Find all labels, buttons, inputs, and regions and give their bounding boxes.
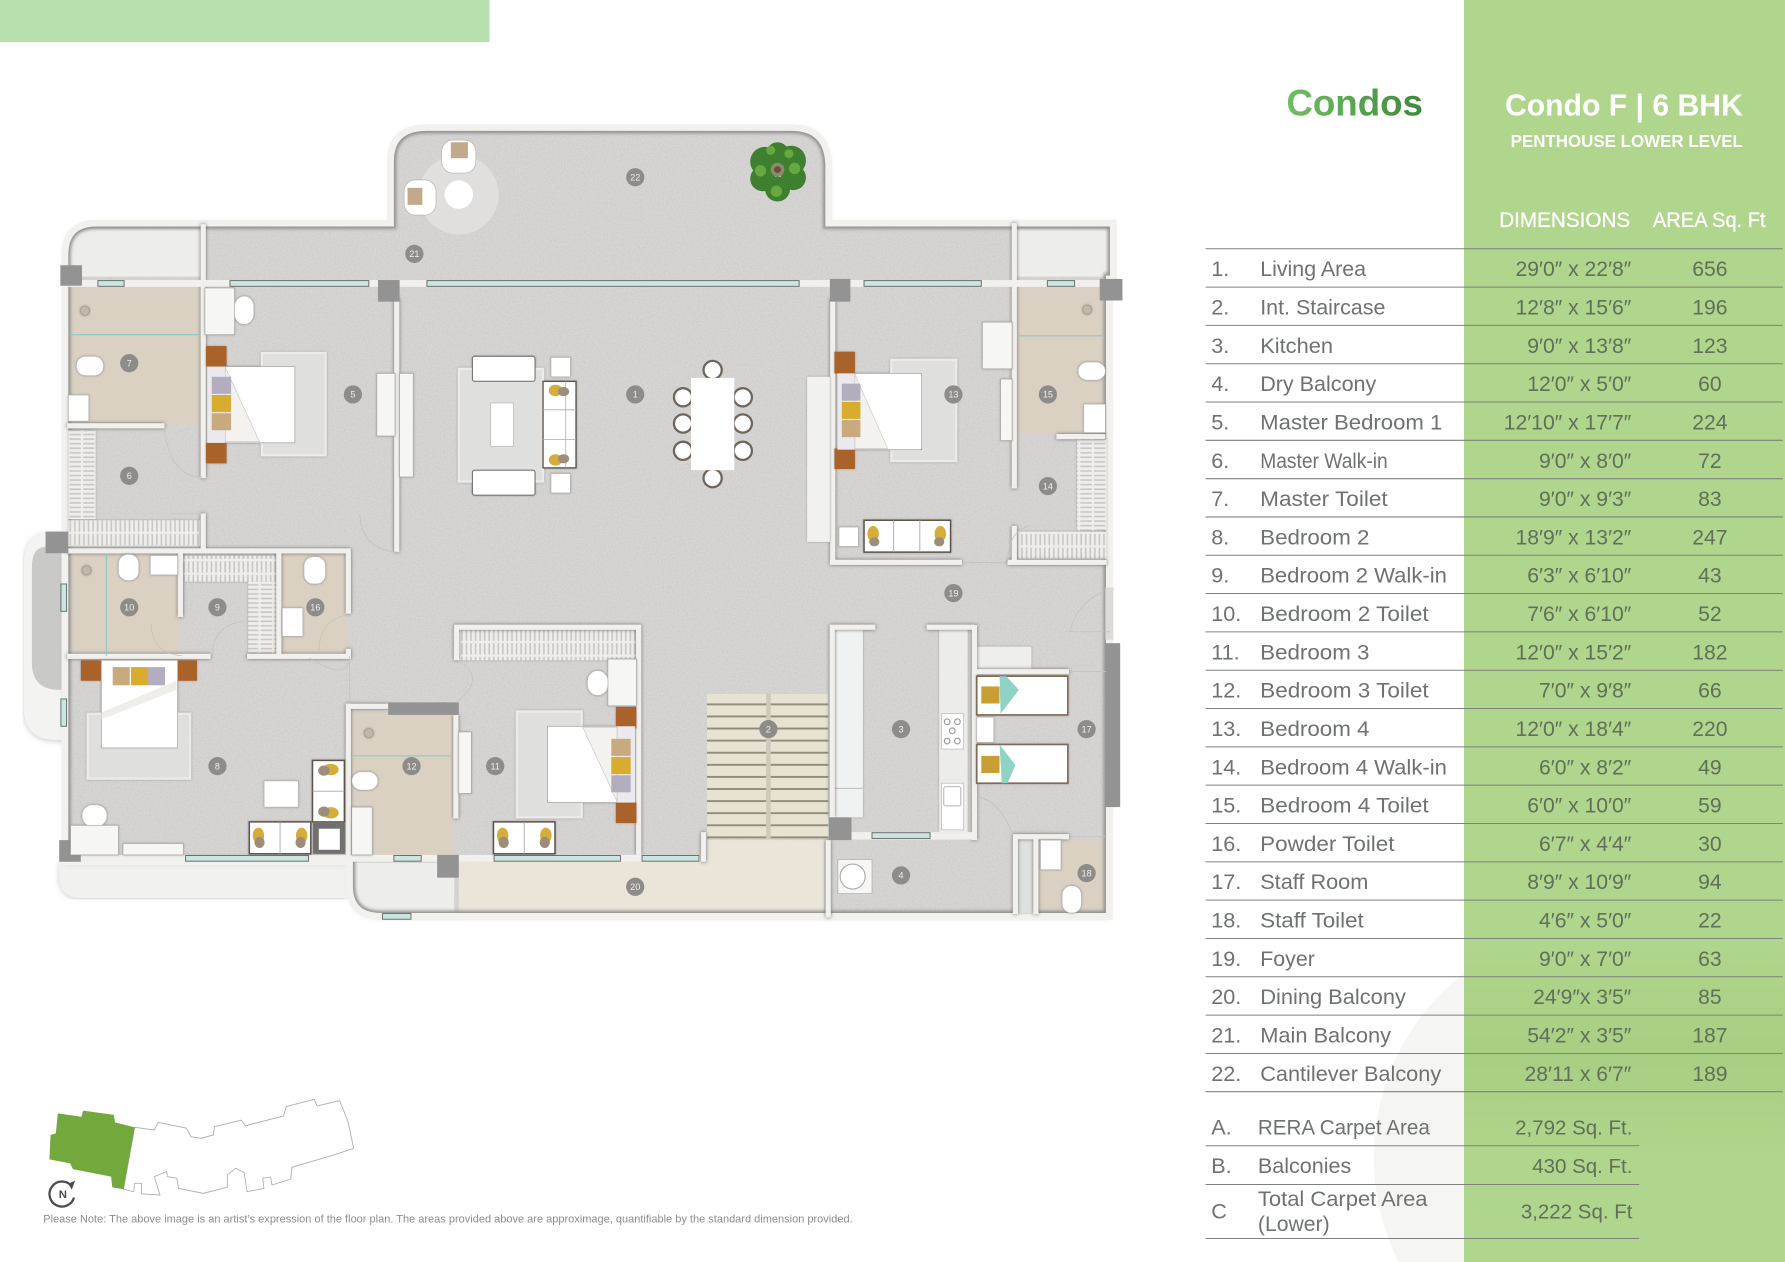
row 17: Staff Room	[1260, 869, 1368, 894]
key plan	[49, 1099, 354, 1195]
marker 11: 11	[490, 761, 500, 771]
row 16: Powder Toilet	[1260, 831, 1395, 856]
marker 13	[944, 385, 963, 404]
marker 10	[120, 598, 138, 616]
marker 19: 19	[948, 588, 958, 598]
summary A: A.	[1211, 1114, 1232, 1139]
summary C: (Lower)	[1258, 1211, 1330, 1236]
marker 1: 1	[633, 390, 638, 400]
bathroom fixtures	[68, 305, 1105, 913]
row 17: 17.	[1211, 869, 1241, 894]
marker 18: 18	[1082, 868, 1092, 878]
row 20: Dining Balcony	[1260, 984, 1406, 1009]
column header: area: AREA Sq. Ft	[1653, 209, 1766, 232]
row 7: Master Toilet	[1260, 486, 1388, 511]
row 7: 83	[1698, 488, 1722, 511]
row 19	[1211, 946, 1722, 971]
bedroom 2 furniture	[71, 660, 345, 855]
balcony voids	[68, 229, 1110, 913]
row 1: Living Area	[1260, 256, 1367, 281]
row 18	[1211, 908, 1722, 933]
marker 8	[208, 757, 227, 775]
row 7	[1211, 486, 1722, 511]
row 4: 12′0″ x 5′0″	[1527, 373, 1632, 396]
row 13: 220	[1692, 718, 1728, 741]
marker 6: 6	[127, 471, 132, 481]
master bedroom 1 furniture	[205, 288, 413, 477]
marker 3	[892, 720, 910, 738]
row 16: 16.	[1211, 831, 1241, 856]
outer wall	[65, 127, 1113, 916]
row 5: 224	[1692, 411, 1728, 434]
marker 16: 16	[310, 603, 320, 613]
marker 22	[626, 168, 644, 186]
teal shower lines	[69, 335, 1104, 756]
area summary table	[1206, 1114, 1639, 1239]
marker 21	[405, 245, 423, 263]
marker 5: 5	[350, 390, 355, 400]
marker 14	[1039, 477, 1057, 495]
disclaimer note: Please Note: The above image is an artist’s expression of the floor plan. The areas provided above are approximage, quantifiable by the standard dimension provided.	[43, 1214, 853, 1226]
interior walls	[67, 223, 1107, 918]
row 12: Bedroom 3 Toilet	[1260, 678, 1429, 703]
row 6: 6.	[1211, 448, 1229, 473]
foyer door opening	[1105, 587, 1113, 640]
row 9: 9.	[1211, 563, 1229, 588]
door swings	[151, 428, 1110, 837]
row 1: 656	[1692, 258, 1728, 281]
row 8: Bedroom 2	[1260, 524, 1369, 549]
marker 14: 14	[1043, 481, 1053, 491]
summary B	[1211, 1153, 1632, 1178]
row 11	[1211, 639, 1728, 664]
heading: Condos: Condos	[1286, 83, 1423, 124]
row 19: Foyer	[1260, 946, 1315, 971]
row 12: 12.	[1211, 678, 1241, 703]
row 18: Staff Toilet	[1260, 908, 1364, 933]
north compass	[49, 1180, 75, 1207]
row 7: 9′0″ x 9′3″	[1539, 488, 1632, 511]
row 22: 189	[1692, 1063, 1728, 1086]
row 13: Bedroom 4	[1260, 716, 1369, 741]
row 14: 14.	[1211, 754, 1241, 779]
summary A: RERA Carpet Area	[1258, 1114, 1431, 1139]
row 9: Bedroom 2 Walk-in	[1260, 563, 1447, 588]
living room rug and furniture	[459, 356, 576, 495]
row 12	[1211, 678, 1722, 703]
marker 15: 15	[1043, 390, 1053, 400]
marker 7: 7	[127, 358, 132, 368]
bedroom 3 furniture	[459, 659, 636, 854]
marker 12	[402, 757, 421, 775]
marker 6	[120, 467, 138, 485]
row 13: 13.	[1211, 716, 1241, 741]
row 11: 11.	[1211, 639, 1240, 664]
row 8: 18′9″ x 13′2″	[1515, 526, 1632, 549]
row 20	[1211, 984, 1722, 1009]
row 12: 66	[1698, 680, 1722, 703]
right green panel	[1374, 0, 1785, 1262]
row 16: 6′7″ x 4′4″	[1539, 833, 1632, 856]
row 9	[1211, 563, 1722, 588]
marker 22: 22	[630, 173, 640, 183]
subheading: penthouse lower level: PENTHOUSE LOWER LEVEL	[1511, 131, 1743, 151]
row 19: 9′0″ x 7′0″	[1539, 948, 1632, 971]
floor speckle texture	[57, 120, 1121, 922]
row 13: 12′0″ x 18′4″	[1515, 718, 1632, 741]
row 21: Main Balcony	[1260, 1023, 1391, 1048]
marker 8: 8	[215, 761, 220, 771]
marker 2	[759, 720, 778, 738]
column header: dimensions: DIMENSIONS	[1499, 209, 1630, 232]
marker 11	[486, 757, 504, 775]
marker 9	[208, 598, 227, 616]
dining balcony floor	[459, 840, 824, 913]
row 5	[1211, 409, 1728, 434]
staff room beds	[977, 676, 1068, 783]
row 13	[1211, 716, 1728, 741]
row 14	[1211, 754, 1722, 779]
row 9: 6′3″ x 6′10″	[1527, 565, 1632, 588]
row 6: 9′0″ x 8′0″	[1539, 450, 1632, 473]
floor plan	[24, 120, 1122, 922]
row 10	[1211, 601, 1722, 626]
row 5: 12′10″ x 17′7″	[1504, 411, 1632, 434]
marker 2: 2	[766, 724, 771, 734]
row 11: 182	[1692, 641, 1728, 664]
marker 17: 17	[1082, 724, 1092, 734]
bottom ledge	[59, 862, 347, 898]
marker 12: 12	[406, 761, 417, 771]
row 8: 247	[1692, 526, 1728, 549]
key plan highlighted unit	[49, 1111, 135, 1189]
row 21: 21.	[1211, 1023, 1241, 1048]
closets	[68, 430, 1107, 913]
row 5: 5.	[1211, 409, 1229, 434]
row 12: 7′0″ x 9′8″	[1539, 680, 1632, 703]
row 19: 63	[1698, 948, 1722, 971]
row 15: 6′0″ x 10′0″	[1527, 795, 1632, 818]
row 1	[1211, 256, 1728, 281]
row 21	[1211, 1023, 1728, 1048]
row 8: 8.	[1211, 524, 1229, 549]
summary B: B.	[1211, 1153, 1232, 1178]
row 17	[1211, 869, 1722, 894]
key plan building outline	[124, 1099, 354, 1195]
row 3	[1211, 333, 1728, 358]
marker 15	[1039, 385, 1057, 404]
summary B: Balconies	[1258, 1153, 1351, 1178]
row 10: 10.	[1211, 601, 1241, 626]
room schedule table	[1206, 249, 1783, 1092]
outer wall inner shadow	[65, 127, 1113, 916]
row 3: 3.	[1211, 333, 1229, 358]
row 1: 29′0″ x 22′8″	[1515, 258, 1632, 281]
row 22: Cantilever Balcony	[1260, 1061, 1441, 1086]
summary C	[1211, 1186, 1633, 1236]
row 20: 85	[1698, 986, 1722, 1009]
marker 18	[1077, 864, 1096, 882]
row 10: Bedroom 2 Toilet	[1260, 601, 1429, 626]
row 10: 7′6″ x 6′10″	[1527, 603, 1632, 626]
row 7: 7.	[1211, 486, 1229, 511]
row 3: 123	[1692, 335, 1728, 358]
summary A	[1211, 1114, 1632, 1139]
marker 21: 21	[409, 249, 419, 259]
row 2	[1211, 295, 1728, 320]
row 14: 6′0″ x 8′2″	[1539, 756, 1632, 779]
row 18: 4′6″ x 5′0″	[1539, 910, 1632, 933]
row 4: Dry Balcony	[1260, 371, 1376, 396]
row 8	[1211, 524, 1728, 549]
heading: Condo F | 6 BHK: Condo F | 6 BHK	[1505, 88, 1743, 123]
row 21: 187	[1692, 1025, 1728, 1048]
row 15: Bedroom 4 Toilet	[1260, 793, 1429, 818]
row 6: 72	[1698, 450, 1722, 473]
marker 16	[306, 598, 324, 616]
summary C: Total Carpet Area	[1258, 1186, 1429, 1211]
row 15: 15.	[1211, 793, 1241, 818]
row 3: Kitchen	[1260, 333, 1333, 358]
row 20: 20.	[1211, 984, 1241, 1009]
bedroom 4 furniture	[807, 322, 1012, 552]
row 6: Master Walk-in	[1260, 448, 1388, 473]
marker 4	[892, 866, 910, 885]
structural columns	[46, 265, 1122, 878]
plant	[750, 142, 806, 201]
row 1: 1.	[1211, 256, 1229, 281]
marker 9: 9	[215, 603, 220, 613]
row 22: 28′11 x 6′7″	[1525, 1063, 1632, 1086]
row 4: 4.	[1211, 371, 1229, 396]
marker 13: 13	[948, 390, 958, 400]
left bay balcony	[24, 533, 66, 740]
dining table with chairs	[674, 361, 752, 487]
marker 19	[944, 584, 963, 602]
row 20: 24′9″x 3′5″	[1533, 986, 1632, 1009]
row 2: Int. Staircase	[1260, 295, 1385, 320]
row 4	[1211, 371, 1722, 396]
row 2: 12′8″ x 15′6″	[1515, 297, 1632, 320]
row 16	[1211, 831, 1722, 856]
row 19: 19.	[1211, 946, 1241, 971]
marker 3: 3	[899, 724, 904, 734]
kitchen fittings	[838, 714, 964, 894]
row 17: 8′9″ x 10′9″	[1527, 871, 1632, 894]
row 15: 59	[1698, 795, 1722, 818]
row 11: 12′0″ x 15′2″	[1515, 641, 1632, 664]
summary B: 430 Sq. Ft.	[1532, 1155, 1632, 1178]
row 6	[1211, 448, 1722, 473]
marker 5	[344, 385, 362, 404]
row 5: Master Bedroom 1	[1260, 409, 1442, 434]
row 18: 18.	[1211, 908, 1241, 933]
marker 20: 20	[630, 882, 640, 892]
row 4: 60	[1698, 373, 1722, 396]
row 22: 22.	[1211, 1061, 1241, 1086]
summary C: C	[1211, 1199, 1227, 1224]
marker 20	[626, 878, 644, 896]
row 18: 22	[1698, 910, 1722, 933]
room number markers	[120, 168, 1096, 896]
marker 7	[120, 354, 138, 372]
row 9: 43	[1698, 565, 1722, 588]
row 17: 94	[1698, 871, 1722, 894]
floor slab	[65, 127, 1113, 916]
row 3: 9′0″ x 13′8″	[1527, 335, 1632, 358]
summary A: 2,792 Sq. Ft.	[1515, 1116, 1632, 1139]
row 2: 2.	[1211, 295, 1229, 320]
balcony lounge chairs and table	[404, 140, 499, 235]
row 22	[1211, 1061, 1728, 1086]
row 15	[1211, 793, 1722, 818]
marker 10: 10	[124, 603, 134, 613]
row 16: 30	[1698, 833, 1722, 856]
row 11: Bedroom 3	[1260, 639, 1369, 664]
row 14: Bedroom 4 Walk-in	[1260, 754, 1447, 779]
marker 1	[626, 385, 644, 404]
tan toilet floors	[67, 287, 1107, 914]
summary C: 3,222 Sq. Ft	[1521, 1201, 1633, 1224]
north compass: N	[59, 1189, 67, 1201]
window bands and glazing	[61, 280, 1109, 919]
row 21: 54′2″ x 3′5″	[1527, 1025, 1632, 1048]
staircase	[707, 693, 829, 839]
row 14: 49	[1698, 756, 1722, 779]
row 2: 196	[1692, 297, 1728, 320]
top green bar	[0, 0, 490, 42]
marker 17	[1077, 720, 1096, 738]
marker 4: 4	[899, 871, 904, 881]
row 10: 52	[1698, 603, 1722, 626]
